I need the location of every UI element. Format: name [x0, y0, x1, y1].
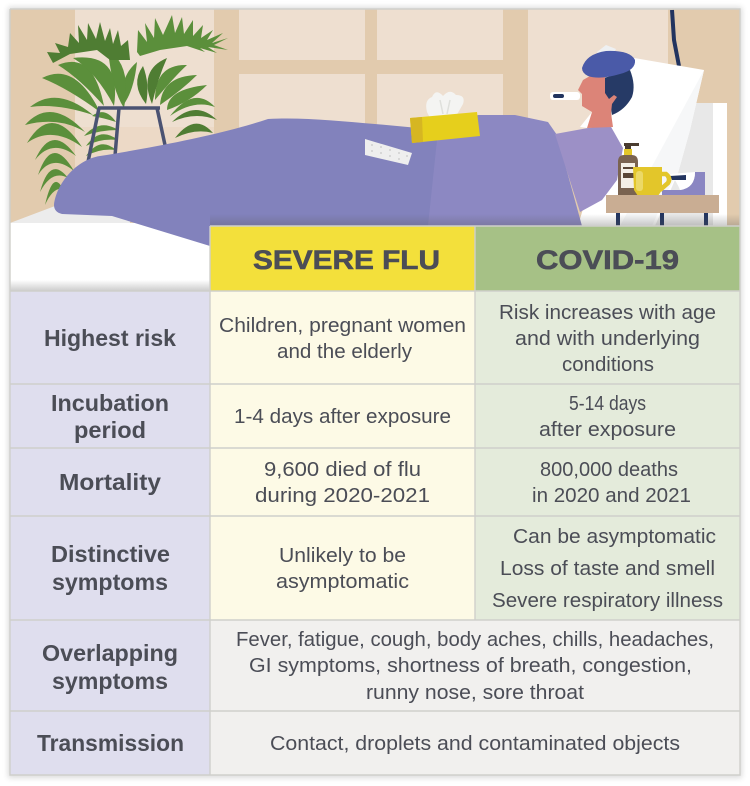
- row: transmission: [37, 730, 680, 756]
- row: distinctive symptoms: asymptomatic: [276, 571, 409, 593]
- icon: patient face: [578, 76, 617, 128]
- row: overlapping symptoms: Overlapping: [42, 640, 178, 666]
- row: highest risk: Risk increases with age: [499, 302, 716, 324]
- pillow: [578, 58, 704, 226]
- row: distinctive symptoms: Can be asymptomatic: [513, 526, 716, 548]
- row: transmission: Contact, droplets and contaminated objects: [270, 733, 680, 755]
- merged rows background: [210, 620, 740, 775]
- row: overlapping symptoms: runny nose, sore throat: [366, 682, 584, 704]
- headboard: [713, 103, 727, 226]
- row: distinctive symptoms: Distinctive: [51, 541, 170, 567]
- row: incubation period: [51, 390, 676, 443]
- row: highest risk: conditions: [562, 354, 654, 376]
- column header: covid-19: COVID-19: [536, 245, 679, 275]
- row: incubation period: Incubation: [51, 390, 169, 416]
- icon: ice pack: [582, 45, 635, 78]
- illustration: patient in bed: [10, 9, 740, 291]
- icon: medicine bottle: [618, 143, 639, 195]
- row: incubation period: period: [74, 417, 146, 443]
- icon: tissue box: [410, 92, 480, 143]
- icon: pill pack: [365, 139, 412, 165]
- row: highest risk: Children, pregnant women: [219, 315, 466, 337]
- column header: severe flu: [210, 226, 475, 291]
- row: distinctive symptoms: Loss of taste and smell: [500, 558, 715, 580]
- row: mortality: [59, 459, 691, 507]
- row: distinctive symptoms: Severe respiratory illness: [492, 590, 723, 612]
- column header: severe flu: SEVERE FLU: [253, 245, 440, 275]
- covid column background: [475, 291, 740, 620]
- row: incubation period: after exposure: [539, 419, 676, 441]
- top right frond: [137, 15, 228, 56]
- row: highest risk: and with underlying: [515, 328, 700, 350]
- blanket: [54, 118, 437, 246]
- icon: plant stand: [88, 108, 165, 162]
- collar: [580, 112, 592, 128]
- row: incubation period: 5-14 days: [569, 393, 646, 415]
- row: overlapping symptoms: symptoms: [52, 668, 168, 694]
- wall: [10, 9, 740, 226]
- icon: fern plant: [25, 15, 228, 205]
- row: highest risk: [44, 302, 716, 376]
- book and pen: [662, 172, 705, 196]
- icon: patient hair: [604, 70, 634, 115]
- row: mortality: during 2020-2021: [255, 485, 430, 507]
- bedside table: [606, 195, 719, 213]
- iv stand: [672, 10, 679, 66]
- left lower leaves: [25, 112, 85, 132]
- row: overlapping symptoms: [42, 629, 714, 704]
- row: distinctive symptoms: symptoms: [52, 569, 168, 595]
- row: mortality: 9,600 died of flu: [264, 459, 421, 481]
- row: overlapping symptoms: Fever, fatigue, cough, body aches, chills, headaches,: [236, 629, 714, 651]
- row: mortality: 800,000 deaths: [540, 459, 678, 481]
- column header: covid-19: [475, 226, 740, 291]
- left upper leaves: [30, 98, 93, 115]
- table legs: [616, 213, 708, 226]
- row: highest risk: Highest risk: [44, 325, 177, 351]
- bed: [10, 206, 210, 291]
- small fronds behind stand: [84, 112, 118, 156]
- window panes: [75, 10, 668, 134]
- severe flu column background: [210, 291, 475, 620]
- row: overlapping symptoms: GI symptoms, shortness of breath, congestion,: [249, 655, 692, 677]
- row: incubation period: 1-4 days after exposure: [234, 406, 451, 428]
- label column background: [10, 291, 210, 775]
- centre leaves: [124, 62, 137, 103]
- arm: [555, 125, 623, 212]
- icon: thermometer: [550, 92, 580, 100]
- right leaves: [155, 65, 187, 100]
- row: mortality: Mortality: [59, 469, 161, 495]
- top left dark frond: [47, 22, 130, 63]
- row: distinctive symptoms: Unlikely to be: [279, 545, 406, 567]
- row: transmission: Transmission: [37, 730, 184, 756]
- row: mortality: in 2020 and 2021: [532, 485, 691, 507]
- row: highest risk: and the elderly: [277, 341, 412, 363]
- row: distinctive symptoms: [51, 526, 723, 612]
- body under blanket: [428, 115, 582, 226]
- icon: mug: [633, 167, 669, 196]
- right lower leaves: [172, 110, 217, 138]
